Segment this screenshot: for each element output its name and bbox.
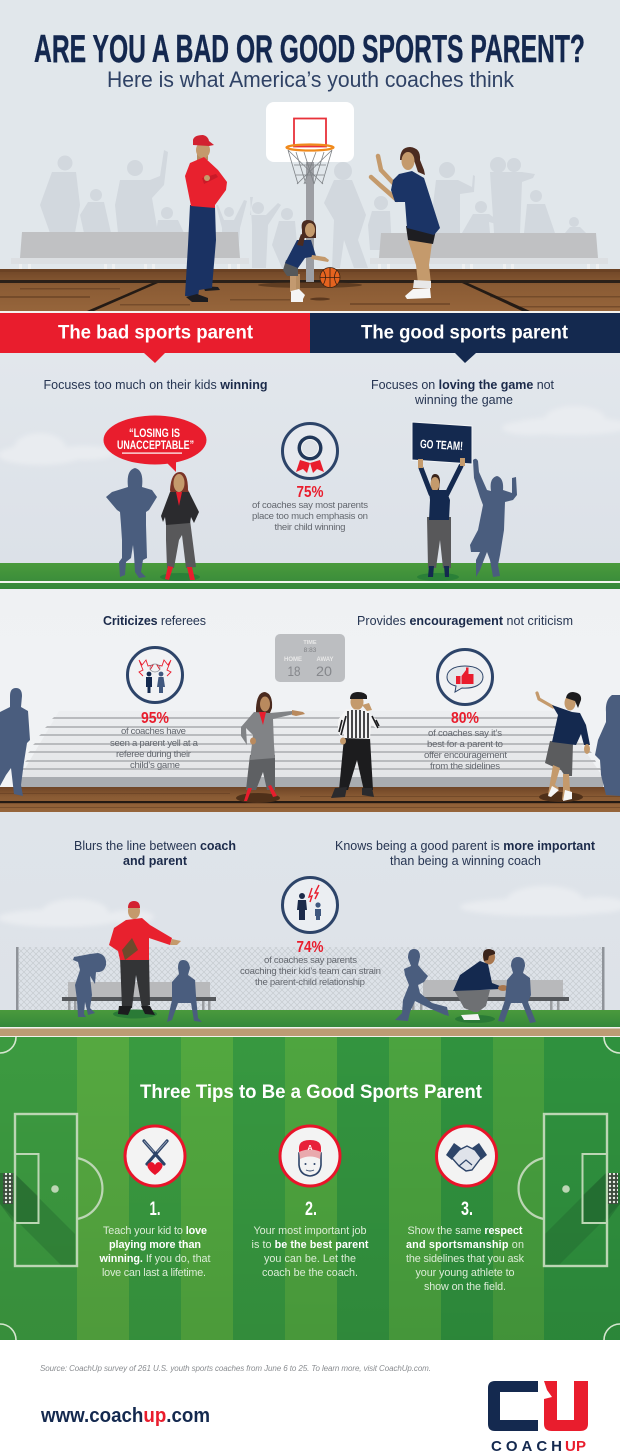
speech bubble [104, 416, 206, 472]
icon: cap face: A [307, 1145, 313, 1152]
tip 1: 1. [150, 1199, 160, 1220]
tip 3: and sportsmanship on [406, 1239, 524, 1251]
stat: 75%: place too much emphasis on [252, 511, 368, 522]
tip 2 [252, 1199, 369, 1279]
woman holding sign [417, 458, 465, 581]
scoreboard: HOME [284, 656, 303, 663]
banner pointers [144, 353, 476, 363]
section background [0, 812, 620, 1010]
website url: www.coachup.com [40, 1405, 210, 1427]
silhouette left [0, 688, 30, 796]
man giving thumbs up [537, 692, 590, 801]
heading: bad [74, 839, 236, 868]
panel: focus on winning [0, 353, 620, 589]
footer background [0, 1340, 620, 1452]
tip 1: love can last a lifetime. [102, 1267, 206, 1279]
panel: header scene [0, 0, 620, 313]
right goal area [519, 1114, 620, 1266]
stat: 75%: 75% [296, 484, 324, 501]
speech bubble: UNACCEPTABLE” [117, 438, 194, 452]
left cloud [0, 899, 154, 927]
heading: good [371, 378, 555, 407]
section background [0, 589, 620, 787]
man crouching with child [453, 949, 508, 1023]
silhouette child comforted [498, 957, 536, 1023]
bad parent banner [0, 313, 310, 353]
logo [488, 1381, 588, 1452]
tip 1: winning. If you do, that [98, 1253, 210, 1265]
child dribbling [283, 220, 340, 302]
stat: 74%: coaching their kid’s team can strain [240, 966, 381, 977]
stat: 75% [252, 484, 368, 533]
basketball court floor [0, 269, 620, 311]
source note: Source: CoachUp survey of 261 U.S. youth sports coaches from June 6 to 25. To learn more, visit CoachUp.com. [40, 1364, 431, 1373]
heading: good [335, 839, 596, 868]
heading: bad: Focuses too much on their kids winning [44, 378, 268, 392]
sign: GO TEAM [412, 422, 472, 464]
stat: 74%: 74% [296, 939, 324, 956]
heading: good: Focuses on loving the game not [371, 378, 555, 392]
silhouette child bending [73, 953, 106, 1017]
silhouette right [595, 695, 620, 796]
tip 2: coach be the coach. [262, 1267, 358, 1279]
heading: good: Knows being a good parent is more important [335, 839, 596, 853]
wood floor [0, 787, 620, 812]
scoreboard: 8:83 [304, 647, 317, 654]
coach with arms crossed [185, 135, 227, 302]
tip 1: playing more than [109, 1239, 201, 1251]
referee [331, 692, 380, 798]
pitch stripes [0, 1037, 620, 1340]
tip 3: 3. [461, 1199, 473, 1220]
silhouette parent [106, 468, 157, 578]
tip 1 [98, 1199, 210, 1279]
woman pointing [241, 692, 305, 801]
scoreboard: 18 [288, 663, 301, 679]
icon: bats and heart [125, 1126, 185, 1186]
good parent banner [310, 313, 620, 353]
silhouette cheering [470, 459, 517, 577]
panel: footer [0, 1340, 620, 1452]
tip 3: the sidelines that you ask [406, 1253, 525, 1265]
grass strip [0, 1010, 620, 1027]
scoreboard [275, 634, 345, 682]
panel: three tips field [0, 1037, 620, 1340]
scoreboard: 20 [316, 663, 332, 679]
stat: 80%: 80% [451, 710, 479, 727]
stat: 80%: offer encouragement [424, 750, 507, 761]
right dugout bench [407, 980, 569, 1010]
left bench [11, 232, 249, 276]
silhouette child seated [167, 960, 202, 1022]
icon: cap face [280, 1126, 340, 1186]
left dugout bench [62, 982, 216, 1010]
scoreboard: AWAY [316, 656, 334, 663]
stat: 74%: the parent-child relationship [255, 977, 365, 988]
heading: good: Provides encouragement not criticism [357, 614, 573, 628]
heading: good: winning the game [414, 393, 513, 407]
bleachers [20, 711, 603, 787]
stat: 74%: of coaches say parents [264, 955, 357, 966]
stat: 80%: from the sidelines [430, 761, 500, 772]
white court edge [0, 311, 620, 313]
panel: column banners [0, 313, 620, 353]
tip 2: 2. [305, 1199, 317, 1220]
heading: bad: Criticizes referees [103, 614, 206, 628]
panel: criticizes referees [0, 589, 620, 812]
coach pointing [109, 901, 181, 1018]
heading: bad: and parent [123, 854, 188, 868]
stat: 75%: their child winning [274, 522, 346, 533]
icon: thumbs up [438, 650, 492, 704]
subtitle: Here is what America’s youth coaches think [107, 67, 515, 92]
stat: 95% [110, 710, 199, 771]
stat: 80%: of coaches say it’s [428, 728, 502, 739]
panel: coach versus parent [0, 812, 620, 1038]
stat: 95%: child’s game [130, 760, 180, 771]
left goal area [0, 1114, 102, 1266]
speech bubble: “LOSING IS [129, 426, 180, 440]
woman in blazer [160, 472, 200, 581]
tip 1: Teach your kid to love [103, 1225, 207, 1237]
tip 2: Your most important job [254, 1225, 366, 1237]
mother catching [371, 147, 440, 299]
scoreboard: TIME [303, 640, 317, 646]
grass strip [0, 563, 620, 589]
heading: good: than being a winning coach [390, 854, 541, 868]
tip 3: Show the same respect [408, 1225, 523, 1237]
header background [0, 0, 620, 313]
stat: 80%: best for a parent to [427, 739, 503, 750]
stat: 80% [424, 710, 507, 772]
section background [0, 353, 620, 563]
basketball hoop [266, 102, 354, 282]
crowd silhouettes [40, 150, 586, 268]
left cloud [0, 433, 115, 465]
tip 2: is to be the best parent [252, 1239, 369, 1251]
stat: 75%: of coaches say most parents [252, 500, 368, 511]
right cloud [460, 886, 620, 916]
sign: GO TEAM: GO TEAM! [420, 437, 463, 453]
right cloud [502, 406, 620, 435]
tip 3: your young athlete to [416, 1267, 514, 1279]
stat: 95%: seen a parent yell at a [110, 738, 199, 749]
tip 2: you can be. Let the [264, 1253, 356, 1265]
tip 3: show on the field. [424, 1281, 506, 1293]
good parent banner: The good sports parent [361, 322, 569, 344]
stat: 95%: 95% [141, 710, 169, 727]
silhouette runner [395, 949, 449, 1021]
track [0, 1027, 620, 1038]
stat: 74% [240, 939, 381, 988]
heading: bad: Blurs the line between coach [74, 839, 236, 853]
tip 3 [406, 1199, 525, 1293]
stat: 95%: referee during their [116, 749, 192, 760]
bad parent banner: The bad sports parent [58, 322, 254, 344]
icon: parent and child conflict [282, 878, 338, 932]
icon: yelling parents [128, 648, 182, 702]
corner arcs [0, 1037, 620, 1340]
chain link fence [16, 947, 604, 1010]
right bench [370, 233, 608, 276]
icon: handshake [436, 1126, 496, 1186]
icon: ribbon award [282, 424, 338, 478]
tips heading: Three Tips to Be a Good Sports Parent [140, 1081, 482, 1103]
stat: 95%: of coaches have [121, 726, 186, 737]
